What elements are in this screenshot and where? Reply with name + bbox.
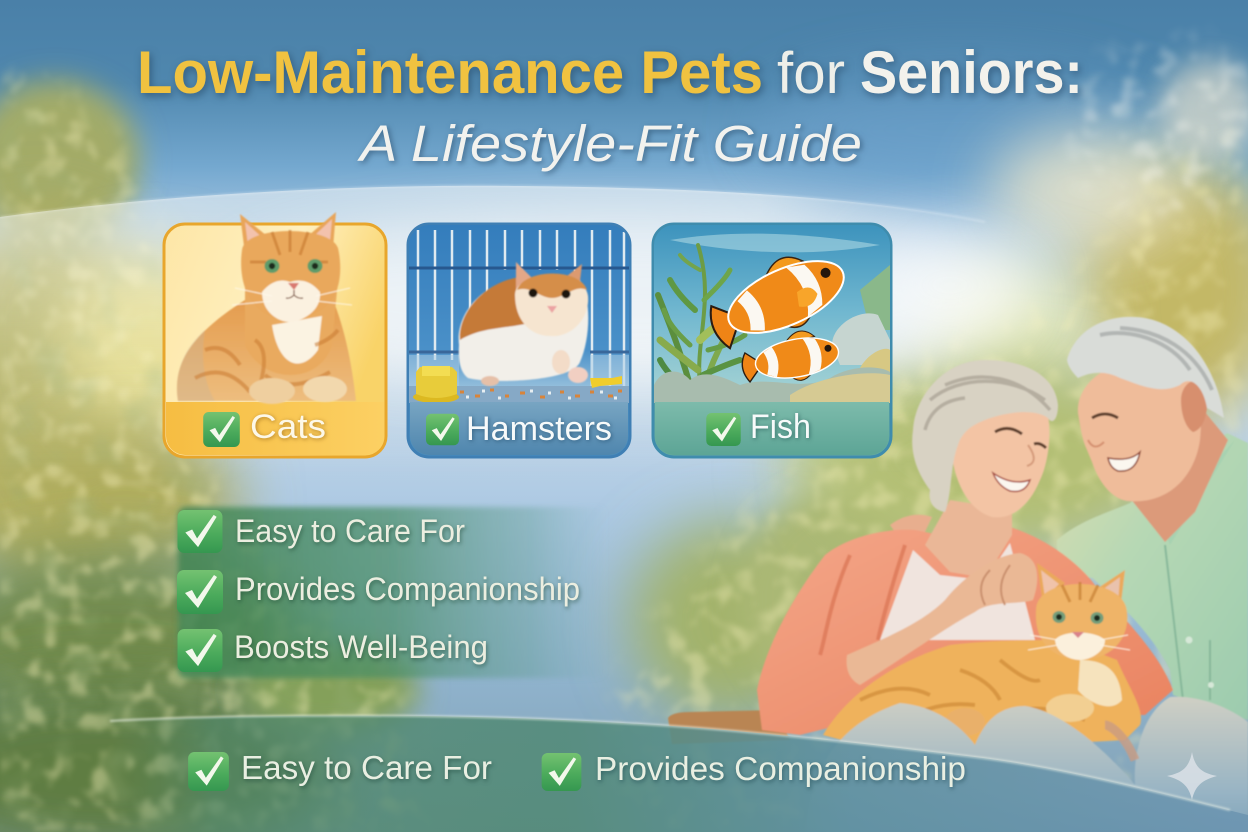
check icon (426, 414, 459, 445)
benefit: well-being: Boosts Well-Being (234, 629, 488, 665)
label: Hamsters: Hamsters (466, 410, 612, 448)
man's shirt (1057, 433, 1248, 720)
panel: Cats card (164, 212, 386, 457)
list backdrop (178, 507, 608, 678)
panel: bottom band (110, 716, 1248, 832)
title: gold part: Low-Maintenance Pets (137, 39, 763, 106)
hamster (459, 262, 588, 386)
check icon (178, 510, 222, 553)
check icon (542, 753, 581, 791)
panel: Hamsters card (408, 224, 630, 457)
orange cat (823, 563, 1141, 748)
subtitle: A Lifestyle-Fit Guide (357, 115, 862, 172)
face (950, 391, 1049, 517)
central wash under the arc (0, 186, 938, 444)
hair (912, 360, 1058, 512)
trousers (805, 697, 1248, 832)
panel: Fish card (653, 224, 891, 457)
bench (668, 710, 790, 744)
hand on shoulder (890, 515, 932, 532)
title: for: for (777, 41, 845, 106)
check icon (706, 413, 741, 446)
small clownfish (742, 330, 840, 383)
left foliage fields (0, 80, 140, 240)
big clownfish (710, 256, 845, 350)
band background (110, 716, 1248, 832)
Cats card footer (166, 402, 384, 455)
white shirt (880, 543, 1035, 640)
check icon (203, 412, 240, 447)
benefit: easy to care for: Easy to Care For (235, 513, 465, 549)
dappled leaves (0, 68, 409, 832)
illustration: senior couple with cat (668, 317, 1248, 832)
Hamsters card footer (410, 402, 628, 455)
right foliage fields (1075, 160, 1248, 420)
cardigan (757, 527, 1173, 735)
yellow feeder (413, 366, 459, 403)
rocks (832, 313, 890, 365)
bottom benefit: companionship: Provides Companionship (595, 750, 966, 787)
woman (757, 360, 1173, 735)
aquarium illustration (654, 225, 890, 403)
check icon (188, 752, 229, 791)
title: Seniors: Seniors: (860, 39, 1083, 106)
label: Fish: Fish (750, 408, 811, 446)
illustration: orange cat (177, 212, 356, 404)
neck (925, 500, 1012, 578)
benefit: companionship: Provides Companionship (235, 571, 580, 607)
Hamster illustration (409, 225, 630, 403)
bottom benefit: easy to care for: Easy to Care For (241, 749, 492, 786)
title (137, 39, 1083, 106)
man (1057, 317, 1248, 720)
check icon (178, 629, 222, 672)
label: Cats: Cats (250, 408, 326, 446)
check icon (177, 570, 223, 614)
forearm and hand (847, 553, 1037, 685)
Fish card footer (655, 402, 889, 455)
panel: benefits list (177, 507, 608, 678)
icon: sparkle watermark (1167, 752, 1217, 800)
man's neck and head (1130, 400, 1228, 542)
seaweed (658, 245, 745, 385)
